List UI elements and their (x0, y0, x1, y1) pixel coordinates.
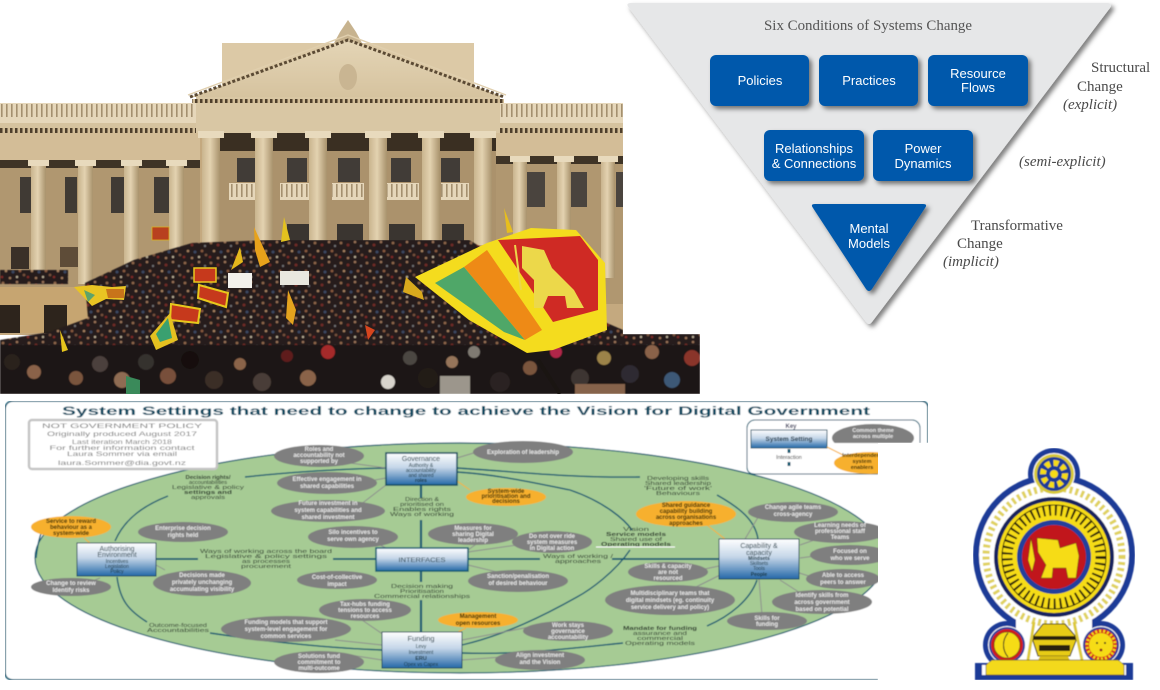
grey ellipses: accumulating visibility (170, 587, 235, 593)
grey ellipses: Future investment in (298, 501, 358, 507)
label: Transformative Change (943, 218, 1063, 270)
crowd on the steps (0, 240, 700, 394)
grey ellipses: based on potential (795, 607, 849, 613)
text labels on arrows: Direction & (405, 497, 439, 503)
grey ellipses: across government (794, 600, 850, 606)
grey ellipses: governance (551, 629, 585, 635)
grey ellipses: funding (756, 622, 778, 628)
grey ellipses: in Digital action (530, 546, 575, 552)
note box: Last iteration March 2018 (72, 440, 173, 446)
node: Capability & Capacity (719, 539, 799, 579)
grey ellipses: Silo incentives to (328, 530, 378, 536)
node: Capability & Capacity: Mindsets (748, 556, 770, 562)
grey ellipses: shared capabilities (300, 484, 355, 490)
grey ellipses: Skills & capacity (644, 564, 692, 570)
grey ellipses: Roles and (305, 447, 334, 453)
grey ellipses: Change to review (46, 581, 96, 587)
grey ellipses: Sanction/penalisation (487, 574, 549, 580)
grey ellipses: supported by (300, 459, 339, 465)
small flags in crowd (60, 208, 513, 394)
node: Funding: Levy (416, 644, 427, 650)
text labels on arrows: Ways of working across the board (200, 549, 332, 555)
text labels on arrows: Operating models (601, 542, 671, 548)
grey ellipses: Enterprise decision (155, 526, 211, 532)
grey ellipses: accountability (548, 635, 589, 641)
grey ellipses: system capabilities and (294, 508, 362, 514)
moon disc (989, 627, 1025, 663)
text labels on arrows: Operating models (625, 641, 695, 647)
node: Capability & Capacity: Skillsets (750, 561, 769, 567)
node: Funding (382, 632, 462, 668)
legend key top: Common theme (852, 428, 894, 434)
grey ellipses: Able to access (822, 573, 865, 579)
text labels on arrows: Service models (606, 532, 666, 538)
grey ellipses: Change agile teams (765, 505, 822, 511)
grey ellipses: who we serve (829, 556, 870, 562)
grey ellipses: sharing Digital (452, 532, 494, 538)
note box: For further information contact (50, 446, 195, 452)
text labels on arrows: Ways of working (390, 512, 454, 518)
text labels on arrows: Behaviours (656, 491, 700, 497)
grey ellipses: impact (327, 582, 347, 588)
plinth (986, 660, 1124, 675)
grey ellipses: Do not over ride (529, 534, 576, 540)
node: Authorising Environment: Authorising (99, 546, 135, 553)
grey ellipses: resourced (653, 576, 683, 582)
text labels on arrows: settings and (184, 490, 233, 496)
photo: protest at Presidential Secretariat (0, 20, 700, 394)
heading: Six Conditions of Systems Change (764, 18, 972, 34)
orange ellipses: approaches (669, 521, 703, 527)
text labels on arrows: commercial (637, 636, 683, 642)
label: semi-explicit: (semi-explicit) (1019, 154, 1106, 170)
grey ellipses (31, 441, 890, 673)
legend key lower: Interaction (776, 455, 802, 461)
note box: Laura Sommer via email (67, 452, 177, 458)
legend key top (746, 418, 922, 444)
label: Structural Change: (explicit) (1063, 97, 1117, 113)
node: Funding: Investment (409, 650, 434, 656)
grey ellipses: Align investment (516, 653, 564, 659)
legend key lower: Interdependent (842, 453, 882, 459)
orange ellipses: system-wide (53, 531, 90, 537)
building: colonial facade (0, 20, 623, 335)
grey ellipses: Effective engagement in (292, 477, 362, 483)
orange ellipses: Shared guidance (662, 503, 711, 509)
grey ellipses: Teams (831, 535, 850, 541)
grey ellipses: shared investment (301, 515, 355, 521)
grey ellipses: multi-outcome (298, 666, 340, 672)
label: Transformative Change: Change (957, 236, 1003, 252)
label: Structural Change: Structural (1091, 60, 1150, 76)
white inner (979, 453, 1129, 675)
box: Practices: Practices (842, 73, 896, 88)
orange ellipses: open resources (456, 621, 501, 627)
orange ellipses: Management (460, 614, 496, 620)
text labels on arrows: Vision (623, 527, 649, 533)
text labels on arrows: approaches (555, 559, 601, 565)
big Sri Lankan flag (415, 228, 607, 394)
chart: Six Conditions of Systems Change triangle (627, 3, 1150, 324)
text labels on arrows: as processes (242, 559, 290, 565)
text labels on arrows: 'Future of work' (644, 486, 712, 492)
note box: Originally produced August 2017 (47, 432, 198, 438)
grey ellipses: Identify skills from (795, 593, 849, 599)
orange ellipses: prioritisation and (481, 494, 531, 500)
orange ellipses: decisions (492, 499, 520, 505)
grey ellipses: peers to answer (820, 580, 867, 586)
text labels on arrows: prioritised on (400, 502, 444, 508)
legend key lower: System Setting (766, 436, 813, 443)
triangle background (627, 3, 1111, 324)
legend key top: across multiple (853, 434, 893, 440)
orange ellipses (31, 488, 736, 628)
emblem of Sri Lanka (973, 448, 1135, 680)
text labels on arrows: assurance and (633, 631, 687, 637)
grey ellipses: digital mindsets (eg. continuity (626, 598, 715, 604)
node: Funding: Funding (407, 634, 435, 643)
grey ellipses: professional staff (815, 529, 866, 535)
orange ellipses: across organisations (656, 515, 717, 521)
node: Authorising Environment: Legislation (105, 564, 129, 570)
node: Funding: ERU (415, 656, 427, 662)
text labels on arrows: accountabilities (189, 480, 227, 486)
text labels on arrows: Commercial relationships (374, 594, 470, 600)
text labels on arrows: Decision rights/ (186, 475, 231, 481)
text labels on arrows (147, 475, 712, 647)
green ellipse (35, 443, 885, 673)
text labels on arrows: Developing skills (647, 476, 709, 482)
node: Governance: Authority & (409, 463, 434, 469)
blue outline (973, 448, 1135, 680)
label: Structural Change (1063, 60, 1150, 113)
triangle: Mental Models (812, 204, 926, 291)
grey ellipses: and the Vision (520, 660, 561, 666)
diagram: System Settings (5, 401, 928, 680)
sun disc (1083, 627, 1119, 663)
text labels on arrows: Decision making (391, 584, 453, 590)
box: Relationships & Connections: & Connections (772, 156, 857, 171)
grey ellipses: serve own agency (327, 537, 380, 543)
grey ellipses: accountability not (293, 453, 345, 459)
node: Governance (386, 453, 457, 485)
node: centre (376, 548, 468, 571)
box: Power Dynamics: Power (905, 141, 942, 156)
triangle: Mental Models: Models (848, 236, 890, 251)
node: Authorising Environment (77, 543, 156, 576)
grey ellipses: Skills for (754, 616, 780, 622)
grey ellipses: Tax-hubs funding (340, 602, 390, 608)
grey ellipses: Funding models that support (244, 620, 328, 626)
grey leader lines (90, 445, 820, 660)
node: Authorising Environment: Incentives (106, 559, 129, 565)
grey ellipses: common services (261, 634, 312, 640)
grey ellipses: Decisions made (179, 573, 226, 579)
text labels on arrows: Shared use of (610, 537, 663, 543)
text labels on arrows: Shared leadership (645, 481, 711, 487)
text labels on arrows: procurement (241, 564, 292, 570)
node: Governance: and shared (408, 473, 434, 479)
note box: laura.Sommer@dia.govt.nz (58, 461, 186, 467)
node: Authorising Environment: Policy (110, 569, 124, 575)
box: Power Dynamics (873, 130, 973, 181)
text labels on arrows: Legislative & policy settings (205, 554, 327, 560)
box: Relationships & Connections (764, 130, 864, 181)
box: Resource Flows (928, 55, 1028, 106)
connecting arcs (36, 468, 758, 653)
node: Governance: roles (415, 478, 427, 484)
label: Transformative Change: Transformative (971, 218, 1063, 234)
grey ellipses: Exploration of leadership (487, 450, 559, 456)
grey ellipses: tensions to access (338, 608, 393, 614)
grey ellipses: Cost-of-collective (312, 575, 363, 581)
grey ellipses: Solutions fund (298, 654, 340, 660)
box: Resource Flows: Flows (961, 80, 995, 95)
grey ellipses: commitment to (297, 660, 341, 666)
label: Structural Change: Change (1077, 79, 1123, 95)
grey ellipses: of desired behaviour (488, 581, 548, 587)
grey ellipses: Multidisciplinary teams that (630, 591, 710, 597)
grey ellipses: Identify risks (52, 588, 90, 594)
grey ellipses: Work stays (552, 623, 585, 629)
node: Governance: Governance (402, 456, 440, 463)
triangle: Mental Models: Mental (849, 221, 889, 236)
legend key lower (746, 423, 878, 476)
legend key lower: system (853, 459, 872, 465)
lion (1028, 538, 1079, 578)
grey ellipses: are not (658, 570, 678, 576)
orange ellipses: System-wide (488, 489, 525, 495)
text labels on arrows: Accountabilities (147, 628, 209, 634)
grey ellipses: rights held (168, 533, 199, 539)
grey ellipses: cross-agency (774, 512, 813, 518)
text labels on arrows: Legislative & policy (172, 485, 244, 491)
node: Capability & Capacity: Capability & (740, 543, 778, 550)
urn (1028, 622, 1082, 665)
frame (5, 401, 928, 680)
node: centre: INTERFACES (398, 557, 446, 564)
white underline (596, 546, 675, 548)
box: Relationships & Connections: Relationships (775, 141, 854, 156)
legend key lower: enablers (851, 465, 873, 471)
box: Policies: Policies (738, 73, 783, 88)
text labels on arrows: approvals (191, 495, 225, 501)
grey ellipses: privately unchanging (172, 580, 233, 586)
grey ellipses: Measures for (454, 526, 492, 532)
wreath (986, 488, 1122, 624)
grey ellipses: service delivery and policy) (631, 605, 709, 611)
heading: System Settings that need to change to achieve the Vision for Digital Government (62, 404, 870, 418)
note box: NOT GOVERNMENT POLICY (42, 424, 202, 430)
grey ellipses: system-level engagement for (245, 627, 328, 633)
node: Governance: accountability (406, 468, 437, 474)
orange ellipses: capability building (660, 509, 713, 515)
grey ellipses: resources (351, 614, 380, 620)
text labels on arrows: Mandate for funding (623, 626, 698, 632)
text labels on arrows: Outcome-focused (149, 623, 207, 629)
top dharma wheel (1034, 454, 1074, 494)
text labels on arrows: Prioritisation (400, 589, 444, 595)
orange ellipses: behaviour as a (50, 525, 93, 531)
node: Capability & Capacity: People (751, 572, 767, 578)
orange ellipses: Service to reward (46, 519, 96, 525)
legend key lower: Key (785, 424, 797, 430)
grey ellipses: leadership (458, 538, 488, 544)
grey ellipses: Learning needs of (814, 523, 867, 529)
box: Resource Flows: Resource (950, 66, 1006, 81)
node: Capability & Capacity: Tools (753, 566, 765, 572)
node: Capability & Capacity: capacity (746, 550, 772, 557)
grey ellipses: Focused on (833, 549, 867, 555)
dashed orange links (84, 481, 725, 632)
text labels on arrows: Ways of working / (543, 554, 614, 560)
node: Authorising Environment: Environment (97, 552, 137, 559)
box: Practices (819, 55, 918, 106)
box: Power Dynamics: Dynamics (894, 156, 952, 171)
box: Policies (710, 55, 809, 106)
note box (29, 420, 217, 469)
node: Funding: Opex vs Capex (404, 662, 439, 668)
text labels on arrows: Enables rights (393, 507, 451, 513)
main disc (994, 497, 1114, 617)
grey ellipses: system measures (527, 540, 578, 546)
label: Transformative Change: (implicit) (943, 254, 999, 270)
